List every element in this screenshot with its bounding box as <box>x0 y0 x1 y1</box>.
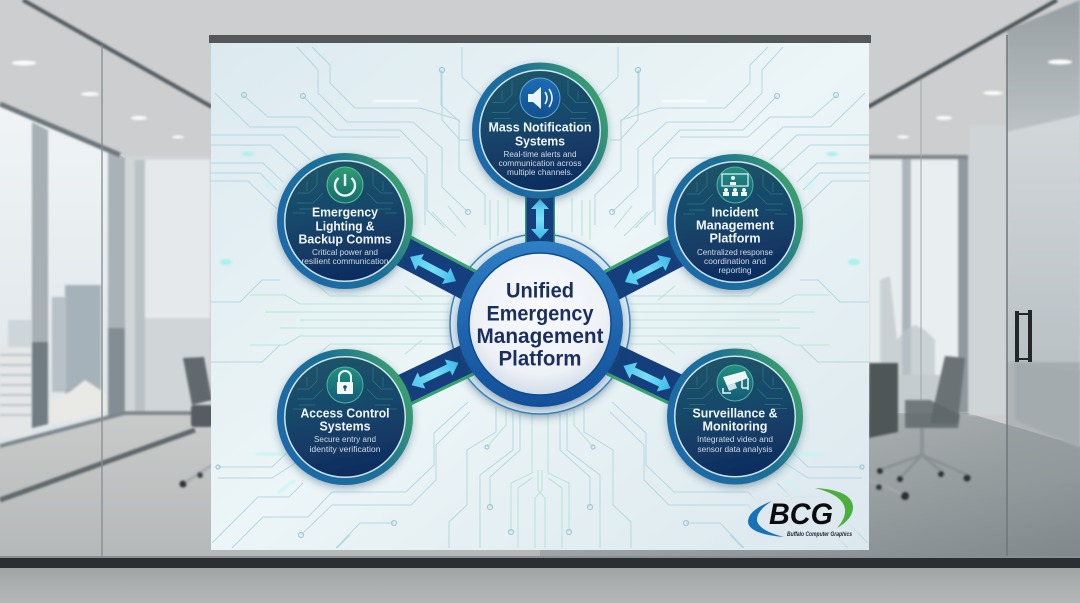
connector: upper left <box>338 205 530 328</box>
left mullions <box>0 104 210 500</box>
node title <box>696 206 775 246</box>
logo: BCG <box>748 488 853 538</box>
node: Incident Management Platform <box>667 154 803 290</box>
icon: padlock <box>327 367 363 403</box>
node description: resilient communication <box>302 256 389 266</box>
node title: Mass Notification <box>488 120 592 134</box>
node description: coordination and <box>704 256 766 266</box>
node title: Monitoring <box>702 420 768 434</box>
hub title <box>476 280 604 370</box>
left floor <box>0 413 540 560</box>
node title: Lighting & <box>316 220 374 234</box>
left skyline <box>0 285 108 437</box>
right cabinet <box>1015 362 1080 448</box>
hub title: Management <box>476 325 604 348</box>
right secondary glass line <box>920 80 922 400</box>
node title <box>300 406 390 434</box>
node title: Backup Comms <box>298 232 392 246</box>
node title: Management <box>696 218 775 232</box>
hub rings <box>457 241 623 407</box>
node description <box>697 247 773 275</box>
node description: communication across <box>498 158 582 168</box>
left ceiling beam <box>23 0 212 107</box>
connector: lower right <box>550 319 742 433</box>
node description: identity verification <box>310 444 381 454</box>
node title: Systems <box>320 420 371 434</box>
node description: Centralized response <box>697 247 773 257</box>
node title <box>692 406 778 434</box>
icon: speaker <box>520 78 560 118</box>
right floor <box>540 413 1080 560</box>
arrow: lower right double arrow <box>620 358 674 396</box>
icon: presentation <box>717 167 753 203</box>
arrow: lower left double arrow <box>408 355 462 393</box>
connector: top <box>525 190 555 250</box>
left windows <box>0 105 125 446</box>
node description: Secure entry and <box>314 434 376 444</box>
door handle <box>1015 310 1032 362</box>
node: Mass Notification Systems <box>472 62 608 198</box>
node title: Systems <box>515 134 565 148</box>
node description: Integrated video and <box>697 434 773 444</box>
hub outer halo ring <box>450 234 630 414</box>
node description: reporting <box>718 265 752 275</box>
arrow: upper right double arrow <box>621 250 675 290</box>
left glass line <box>101 45 103 558</box>
node: Surveillance and Monitoring <box>667 348 803 484</box>
hub title: Emergency <box>486 302 594 326</box>
right glass lines <box>1006 35 1008 558</box>
right chair <box>877 356 970 482</box>
node description <box>498 149 582 177</box>
node: Emergency Lighting and Backup Comms <box>277 153 413 289</box>
arrow: upper left double arrow <box>406 249 460 289</box>
left chair <box>180 357 213 488</box>
panel: wall graphic <box>211 43 869 550</box>
node description: Critical power and <box>312 247 378 257</box>
clear patch behind logo <box>750 492 855 542</box>
glow accents left <box>220 100 500 520</box>
glow accents right <box>580 100 860 520</box>
node title: Platform <box>710 232 760 246</box>
right rooms and windows <box>869 0 1080 482</box>
node description: sensor data analysis <box>698 444 772 454</box>
right ceiling beam <box>868 0 1057 107</box>
node description: Real-time alerts and <box>504 149 577 159</box>
node title <box>298 206 392 246</box>
node title <box>488 120 592 148</box>
arrow: top double arrow <box>531 199 549 239</box>
node: Access Control Systems <box>277 349 413 485</box>
circuit traces right half <box>538 47 869 548</box>
node description <box>697 434 773 454</box>
panel background <box>211 43 869 550</box>
baseboard strip <box>0 556 1080 558</box>
dark chair near panel <box>869 363 909 500</box>
circuit traces left half <box>211 47 542 548</box>
connector: lower left <box>339 319 530 433</box>
connector: upper right <box>550 206 743 328</box>
logo tagline: Buffalo Computer Graphics <box>787 531 852 538</box>
panel top rail <box>209 35 871 43</box>
logo green swoosh <box>815 488 853 528</box>
icon: security camera <box>717 365 753 401</box>
node title: Access Control <box>300 406 390 420</box>
node title: Incident <box>712 206 759 220</box>
node description: multiple channels. <box>507 167 573 177</box>
right ceiling lights <box>897 60 1072 138</box>
black floor channel <box>0 558 1080 568</box>
node title: Emergency <box>312 206 378 220</box>
foreground floor <box>0 568 1080 603</box>
icon: power <box>327 167 363 203</box>
node description <box>302 247 389 266</box>
logo letters: BCG <box>769 498 833 531</box>
node description <box>310 434 381 454</box>
central hub <box>457 241 623 407</box>
hub title: Platform <box>498 348 582 370</box>
logo blue swoosh <box>748 501 784 537</box>
left ceiling lights <box>12 60 184 138</box>
hub title: Unified <box>506 280 574 302</box>
node title: Surveillance & <box>692 406 778 420</box>
